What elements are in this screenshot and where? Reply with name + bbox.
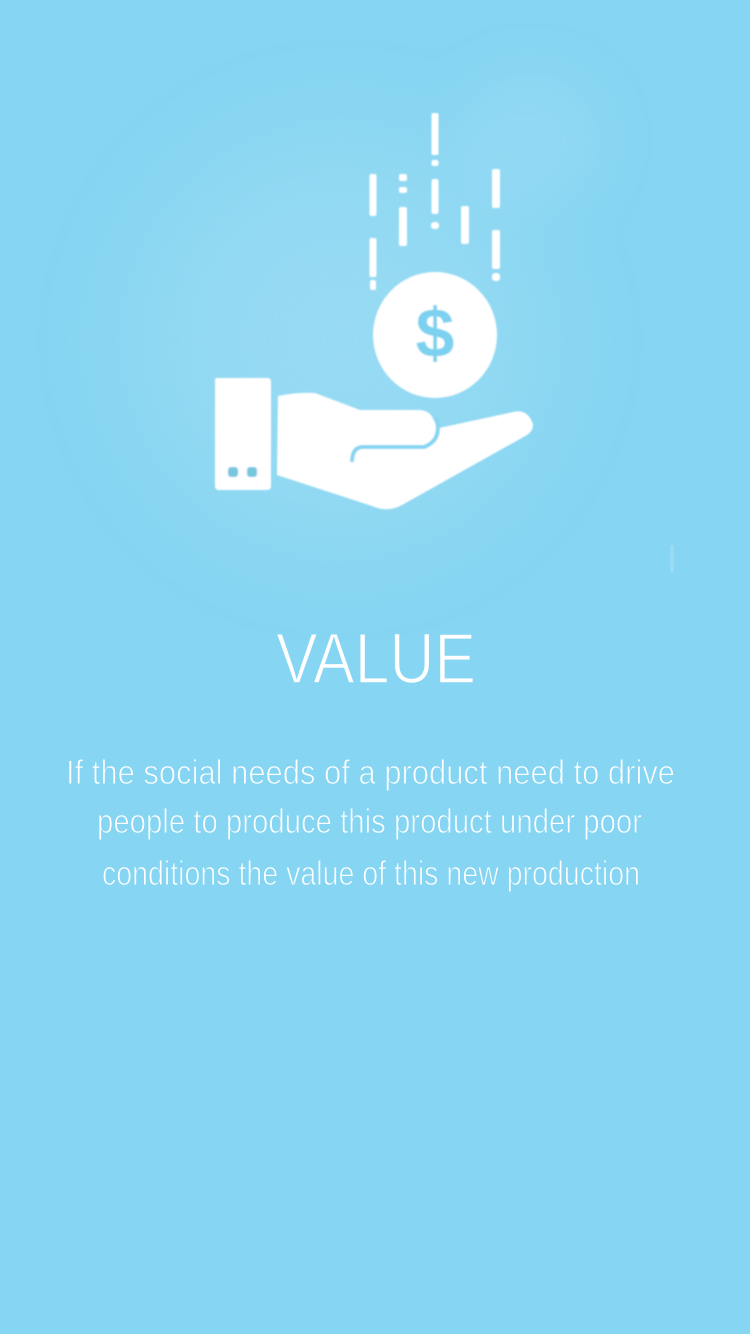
heading: VALUE: VALUE — [276, 620, 476, 699]
icon: hand — [277, 393, 533, 509]
icon: coin — [373, 272, 497, 398]
dollar sign: $ — [416, 294, 454, 372]
text line 3: conditions the value of this new production — [102, 855, 640, 893]
icon: hand holding falling coin — [215, 113, 533, 509]
icon: falling lines — [370, 113, 500, 290]
faint mark — [670, 545, 674, 572]
text line 2: people to produce this product under poor — [97, 803, 642, 841]
background glow — [70, 70, 610, 610]
icon: cuff — [215, 378, 271, 490]
text block: description — [66, 754, 675, 893]
text line 1: If the social needs of a product need to drive — [66, 754, 675, 792]
